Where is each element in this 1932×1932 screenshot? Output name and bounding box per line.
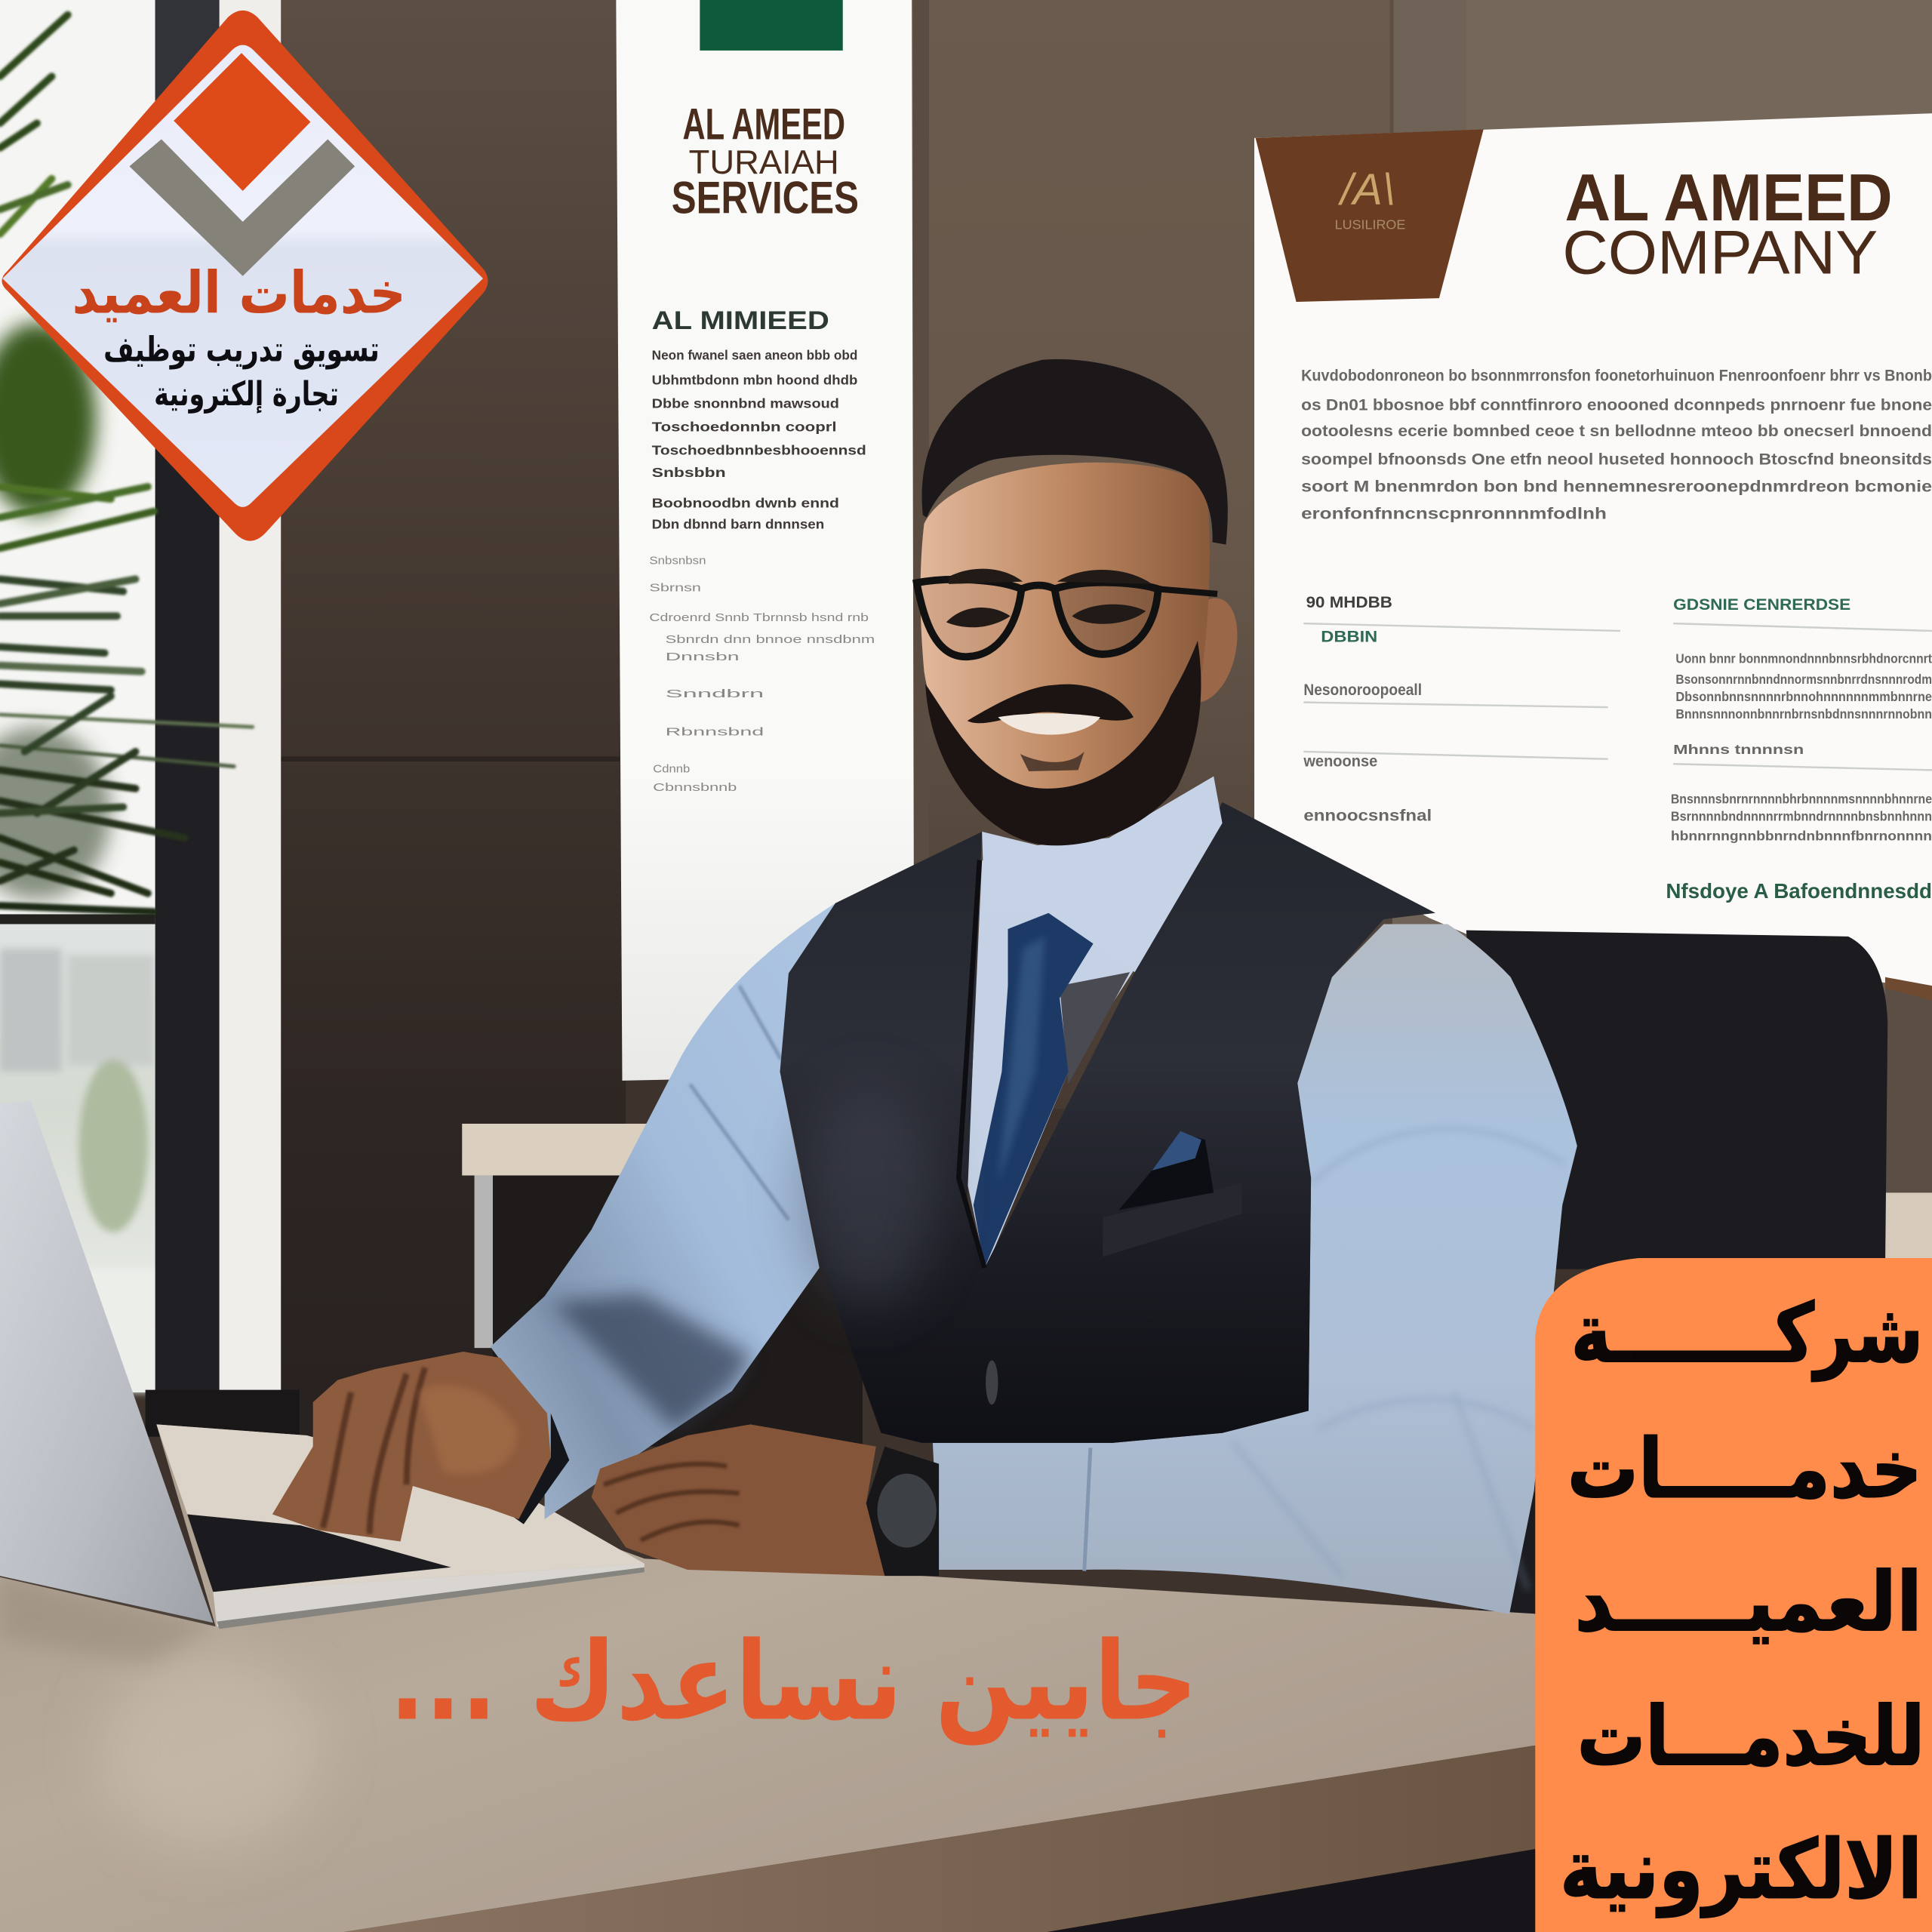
hand viewer-left xyxy=(272,1352,551,1541)
banner heading xyxy=(672,100,859,223)
poster brown emblem: LUSILIROE xyxy=(1335,217,1405,232)
desk surface xyxy=(0,1424,1540,1932)
logo xyxy=(2,11,488,541)
moustache xyxy=(968,685,1134,723)
poster heading: COMPANY xyxy=(1562,218,1878,287)
logo grey chevron xyxy=(129,139,355,276)
poster heading xyxy=(1562,160,1893,287)
vertical banner: Snndbrn xyxy=(666,688,764,700)
banner body text: AL MIMIEED xyxy=(652,306,829,335)
shirt front xyxy=(968,860,1140,1269)
logo title: خدمات العميد xyxy=(72,260,406,328)
vertical banner: Sbrnsn xyxy=(649,583,701,595)
banner heading: TURAIAH xyxy=(689,144,839,181)
poster body text: wenoonse xyxy=(1303,753,1377,771)
glasses xyxy=(917,580,1217,657)
orange panel text xyxy=(1560,1287,1924,1918)
watch xyxy=(866,1447,939,1576)
poster body text: Nesonoroopoeall xyxy=(1303,681,1422,699)
vertical banner: Sbnrdn dnn bnnoe nnsdbnm xyxy=(666,634,875,646)
banner body text: Dbn dbnnd barn dnnnsen xyxy=(652,516,824,531)
poster brown emblem xyxy=(1256,129,1484,302)
banner heading: SERVICES xyxy=(672,171,859,223)
poster brown emblem: /A\ xyxy=(1337,165,1395,214)
vertical banner: Cbnnsbnnb xyxy=(653,782,737,794)
eyes and brows xyxy=(946,569,1152,627)
logo subtitle line one: تسويق تدريب توظيف xyxy=(103,329,380,369)
banner body text: Dbbe snonnbnd mawsoud xyxy=(652,395,839,411)
poster body text: ootoolesns ecerie bomnbed ceoe t sn bellodnne mteoo bb onecserl bnnoend xyxy=(1301,423,1932,440)
orange panel xyxy=(1535,1258,1932,1932)
banner green logo box xyxy=(700,0,843,51)
logo orange diamond frame xyxy=(2,11,488,541)
poster body text: DBBIN xyxy=(1321,629,1377,646)
vest xyxy=(780,802,1435,1443)
vertical banner: Dnnsbn xyxy=(666,651,740,663)
banner body text: Neon fwanel saen aneon bbb obd xyxy=(652,348,857,363)
banner body text: Toschoedonnbn cooprl xyxy=(652,419,837,434)
beard xyxy=(925,641,1201,845)
poster body text: hbnnrnngnnbbnrndnbnnnfbnrnonnnn xyxy=(1671,828,1932,843)
mouth xyxy=(998,713,1100,734)
large company poster xyxy=(1254,113,1932,1001)
face xyxy=(921,463,1210,844)
office chair xyxy=(1466,931,1887,1626)
shirt sleeve viewer-left xyxy=(491,903,835,1519)
banner body text: Snbsbbn xyxy=(652,465,726,480)
side table xyxy=(462,1124,1932,1447)
collar xyxy=(982,777,1223,972)
ear xyxy=(1198,598,1237,703)
vest pocket and pocket square xyxy=(1103,1131,1242,1257)
vertical banner: Snbsnbsn xyxy=(649,555,706,568)
poster body text: os Dn01 bbosnoe bbf conntfinroro enoooned dconnpeds pnrnoenr fue bnone xyxy=(1301,397,1932,414)
poster body text: ennoocsnsfnal xyxy=(1303,807,1432,824)
banner body text xyxy=(652,306,866,531)
hand viewer-right xyxy=(592,1424,884,1576)
vertical banner xyxy=(616,0,914,1081)
logo inner panel xyxy=(2,45,483,507)
banner body text: Boobnoodbn dwnb ennd xyxy=(652,496,839,511)
vertical banner: Cdroenrd Snnb Tbrnnsb hsnd rnb xyxy=(649,612,869,624)
poster footer text: Nfsdoye A Bafoendnnesdd xyxy=(1666,879,1932,903)
poster body text: soompel bfnoonsds One etfn neool huseted honnooch Btoscfnd bneonsitds xyxy=(1301,451,1932,469)
tagline: جايين نساعدك ... xyxy=(389,1619,1198,1746)
person xyxy=(272,359,1577,1614)
shirt sleeve viewer-right xyxy=(933,924,1577,1614)
poster body text: 90 MHDBB xyxy=(1306,594,1392,611)
window with plant xyxy=(0,0,300,1437)
poster body text xyxy=(1301,367,1932,843)
vertical banner: Cdnnb xyxy=(653,764,690,776)
poster heading: AL AMEED xyxy=(1564,160,1893,235)
tie xyxy=(974,913,1095,1268)
poster body text: GDSNIE CENRERDSE xyxy=(1673,596,1850,614)
laptop xyxy=(0,1100,645,1629)
hair xyxy=(922,359,1228,545)
banner heading: AL AMEED xyxy=(682,100,845,149)
banner body text: Toschoedbnnbesbhooennsd xyxy=(652,442,866,457)
banner body text: Ubhmtbdonn mbn hoond dhdb xyxy=(652,372,857,387)
logo orange square xyxy=(174,53,310,191)
cuff band viewer-left xyxy=(512,1414,569,1524)
poster body text: eronfonfnncnscpnronnnmfodlnh xyxy=(1301,505,1607,522)
background: office wall xyxy=(281,0,1932,1478)
poster body text: soort M bnenmrdon bon bnd hennemnesreroonepdnmrdreon bcmonie xyxy=(1301,478,1932,495)
poster body text: Mhnns tnnnnsn xyxy=(1673,742,1804,757)
logo subtitle line two: تجارة إلكترونية xyxy=(154,375,339,414)
vertical banner: Rbnnsbnd xyxy=(666,727,764,739)
